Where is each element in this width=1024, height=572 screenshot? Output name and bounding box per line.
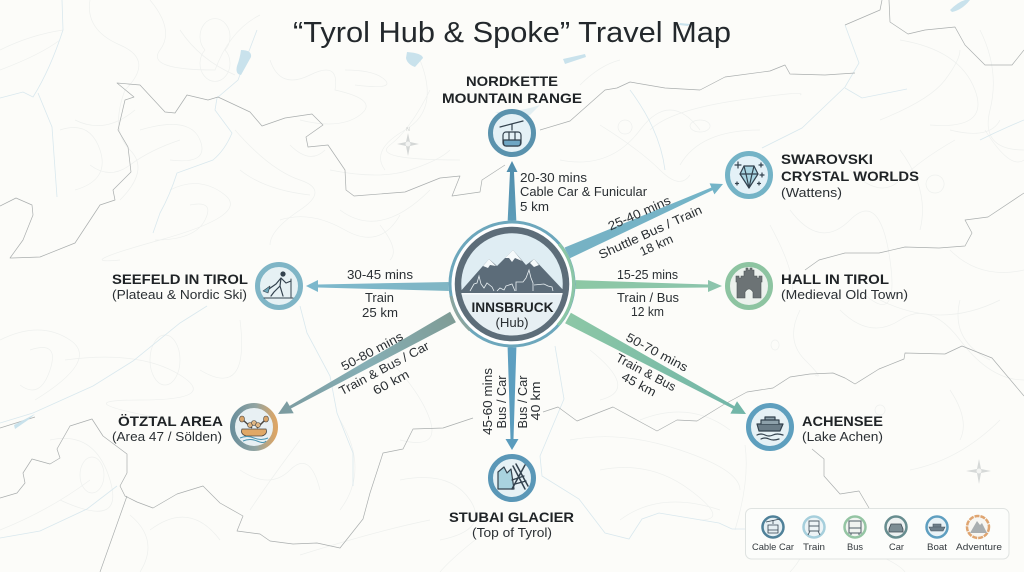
heading: (Top of Tyrol) (472, 525, 552, 540)
icon: crystal (735, 162, 764, 188)
travel info: Achensee: Train & Bus (613, 351, 678, 394)
node: Stubai Glacier (449, 456, 574, 540)
node: Achensee (748, 406, 883, 448)
heading: (Lake Achen) (802, 429, 883, 444)
node: Seefeld in Tirol (112, 264, 300, 308)
hub label: INNSBRUCK (472, 299, 554, 315)
icon: rafting (240, 416, 268, 442)
heading: (Medieval Old Town) (781, 287, 908, 302)
node: Nordkette Mountain Range (442, 73, 582, 154)
heading (802, 413, 883, 444)
heading (781, 151, 919, 200)
icon: castle (736, 268, 762, 298)
travel info: Achensee (613, 330, 690, 399)
travel info: Stubai: Bus / Car (495, 375, 509, 429)
travel info: Nordkette: 5 km (520, 200, 549, 214)
travel info: Nordkette: 20-30 mins (520, 171, 587, 185)
legend: bus: Bus (847, 542, 863, 553)
hub: Innsbruck (448, 220, 576, 348)
travel info: Seefeld: 25 km (362, 306, 398, 320)
arrow: Innsbruck to Otztal (278, 312, 456, 414)
travel info: Otztal: 50-80 mins (339, 329, 405, 374)
travel info: Seefeld: 30-45 mins (347, 268, 413, 282)
travel info: Stubai: Bus / Car (516, 375, 530, 429)
icon: boat (757, 417, 783, 440)
heading: NORDKETTE (466, 73, 558, 89)
travel info: Swarovski: Shuttle Bus / Train (596, 203, 704, 262)
travel info: Hall: 15-25 mins (617, 268, 678, 282)
heading: MOUNTAIN RANGE (442, 90, 582, 106)
travel info: Stubai (481, 368, 543, 435)
icon: nordic skier (263, 272, 293, 298)
legend: car (886, 516, 906, 553)
travel info: Otztal: 60 km (371, 367, 412, 398)
travel info: Stubai: 45-60 mins (481, 368, 495, 435)
travel info: Otztal: Train & Bus / Car (337, 339, 432, 398)
arrow: Innsbruck to Hall (572, 280, 722, 292)
travel info: Hall (617, 268, 679, 319)
travel info: Nordkette (520, 171, 647, 214)
arrow: Innsbruck to Stubai (506, 344, 518, 450)
node: Hall in Tirol (728, 264, 908, 308)
travel info: Hall: Train / Bus (617, 291, 679, 305)
heading (442, 73, 582, 106)
arrow: Innsbruck to Achensee (565, 313, 746, 414)
arrow: Innsbruck to Swarovski (565, 183, 723, 258)
heading: SWAROVSKI (781, 151, 873, 167)
node: Otztal Area (112, 406, 276, 448)
travel info: Achensee: 45 km (619, 370, 658, 399)
legend: boat: Boat (927, 542, 947, 553)
legend: adventure: Adventure (956, 542, 1002, 553)
legend: bus (844, 516, 866, 553)
node: Swarovski Crystal Worlds (728, 151, 919, 200)
icon: cable car (500, 121, 523, 146)
hub: Innsbruck: (Hub) (496, 315, 528, 330)
title: “Tyrol Hub & Spoke” Travel Map (293, 17, 731, 49)
heading (449, 509, 574, 540)
travel info: Stubai: 40 km (529, 382, 543, 420)
legend: train: Train (803, 542, 825, 553)
heading: (Wattens) (781, 185, 842, 200)
legend: boat (926, 516, 948, 553)
legend: cable car: Cable Car (752, 542, 794, 553)
travel info: Seefeld: Train (365, 291, 394, 305)
heading (112, 271, 248, 302)
arrow: Innsbruck to Seefeld (306, 280, 450, 292)
travel info: Swarovski: 18 km (638, 232, 675, 259)
legend: cable car (752, 516, 794, 553)
compass rose (397, 127, 419, 156)
travel info: Swarovski: 25-40 mins (606, 193, 673, 233)
travel info: Seefeld (347, 268, 413, 320)
heading: CRYSTAL WORLDS (781, 168, 919, 184)
legend: adventure (956, 516, 1002, 553)
arrow: Innsbruck to Nordkette (506, 161, 518, 224)
compass rose lower right (966, 459, 991, 484)
heading: STUBAI GLACIER (449, 509, 574, 525)
legend: train (803, 516, 825, 553)
heading: SEEFELD IN TIROL (112, 271, 248, 287)
compass rose: N (406, 127, 410, 133)
heading: HALL IN TIROL (781, 271, 889, 287)
travel info: Nordkette: Cable Car & Funicular (520, 185, 647, 199)
legend: car: Car (889, 542, 904, 553)
heading (112, 413, 223, 444)
travel info: Hall: 12 km (631, 305, 664, 319)
lakes (14, 0, 970, 429)
hub mountains and skyline (461, 250, 563, 336)
heading: (Plateau & Nordic Ski) (112, 287, 247, 302)
travel info: Achensee: 50-70 mins (624, 330, 690, 375)
heading: (Area 47 / Sölden) (112, 429, 222, 444)
heading: ACHENSEE (802, 413, 883, 429)
legend (746, 508, 1009, 559)
icon: glacier and skis (498, 464, 528, 489)
heading (781, 271, 908, 302)
heading: ÖTZTAL AREA (118, 413, 223, 429)
